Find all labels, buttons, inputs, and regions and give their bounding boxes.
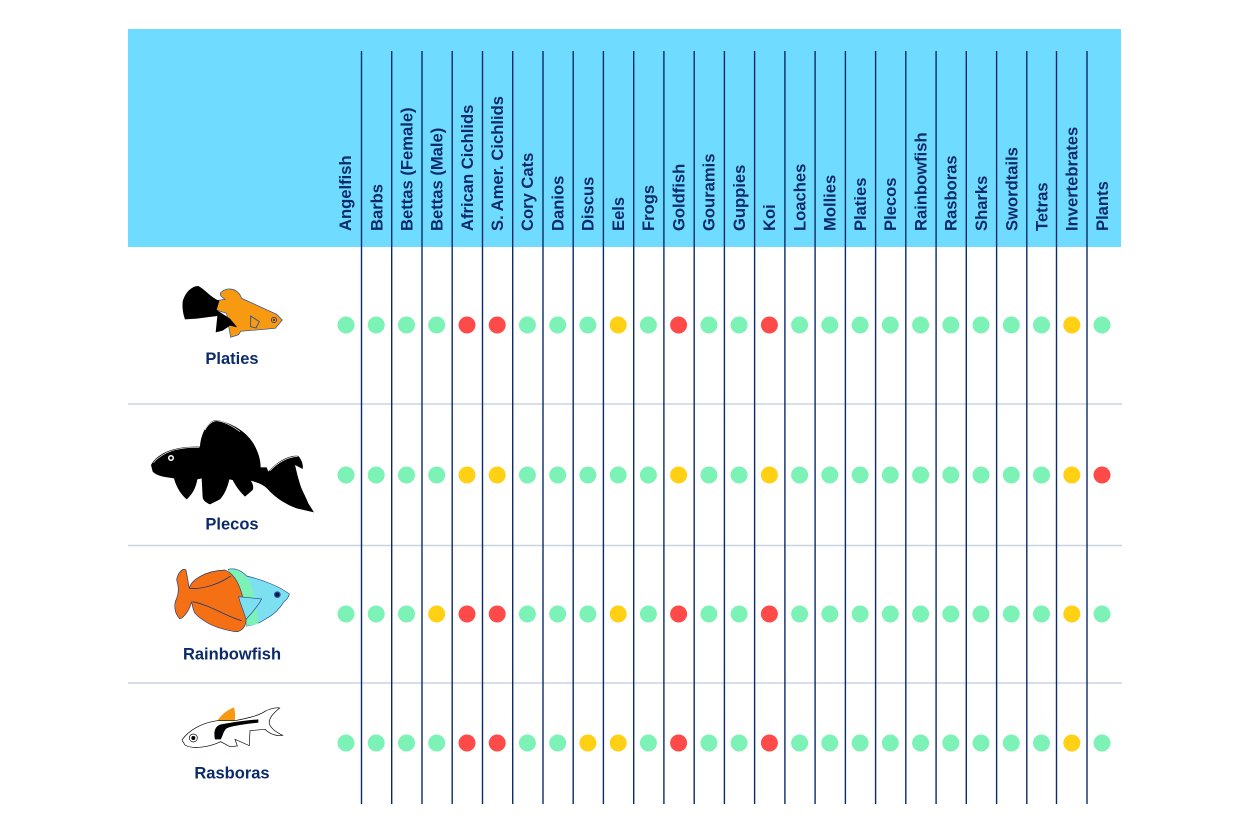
status dots (338, 606, 1110, 622)
column labels: Swordtails (1002, 147, 1022, 231)
status dots (338, 466, 1110, 484)
column labels: Eels (609, 197, 628, 231)
column labels: S. Amer. Cichlids (488, 96, 507, 231)
column labels: Bettas (Female) (398, 107, 416, 231)
column labels: Frogs (639, 185, 658, 231)
label: Platies (205, 350, 259, 368)
column labels: Goldfish (670, 164, 688, 231)
column labels: Danios (548, 176, 568, 231)
row: Plecos (151, 420, 1111, 534)
label: Rasboras (194, 764, 270, 782)
column labels: Barbs (368, 184, 386, 231)
label: Plecos (205, 516, 259, 534)
column labels: Platies (851, 177, 870, 231)
column labels: Loaches (790, 164, 810, 231)
column labels: Guppies (730, 165, 749, 231)
row dividers (128, 404, 1122, 683)
icon: pleco fish (151, 420, 314, 512)
column labels: Invertebrates (1062, 127, 1082, 231)
header band (128, 29, 1121, 247)
column labels: Tetras (1032, 182, 1052, 231)
column labels: Discus (578, 177, 598, 231)
column labels: Cory Cats (518, 153, 537, 231)
column labels: Mollies (820, 175, 840, 231)
status dots (338, 316, 1110, 334)
row: Rasboras (182, 707, 1110, 782)
column labels: Plants (1093, 181, 1112, 231)
column labels: Rasboras (942, 155, 960, 231)
icon: rasbora fish (182, 707, 283, 747)
column labels (336, 96, 1112, 231)
column labels: Koi (760, 204, 779, 231)
label: Rainbowfish (183, 646, 281, 664)
column labels: African Cichlids (458, 105, 477, 231)
column labels: Sharks (972, 176, 991, 231)
icon: platy fish (182, 286, 282, 337)
column labels: Plecos (881, 177, 900, 231)
row: Rainbowfish (175, 569, 1110, 664)
column dividers (362, 51, 1087, 804)
column labels: Gouramis (700, 154, 718, 231)
column labels: Angelfish (336, 155, 355, 231)
status dots (338, 734, 1110, 752)
icon: rainbowfish (175, 569, 289, 632)
column labels: Rainbowfish (912, 132, 930, 231)
column labels: Bettas (Male) (428, 128, 446, 231)
row: Platies (182, 286, 1110, 368)
